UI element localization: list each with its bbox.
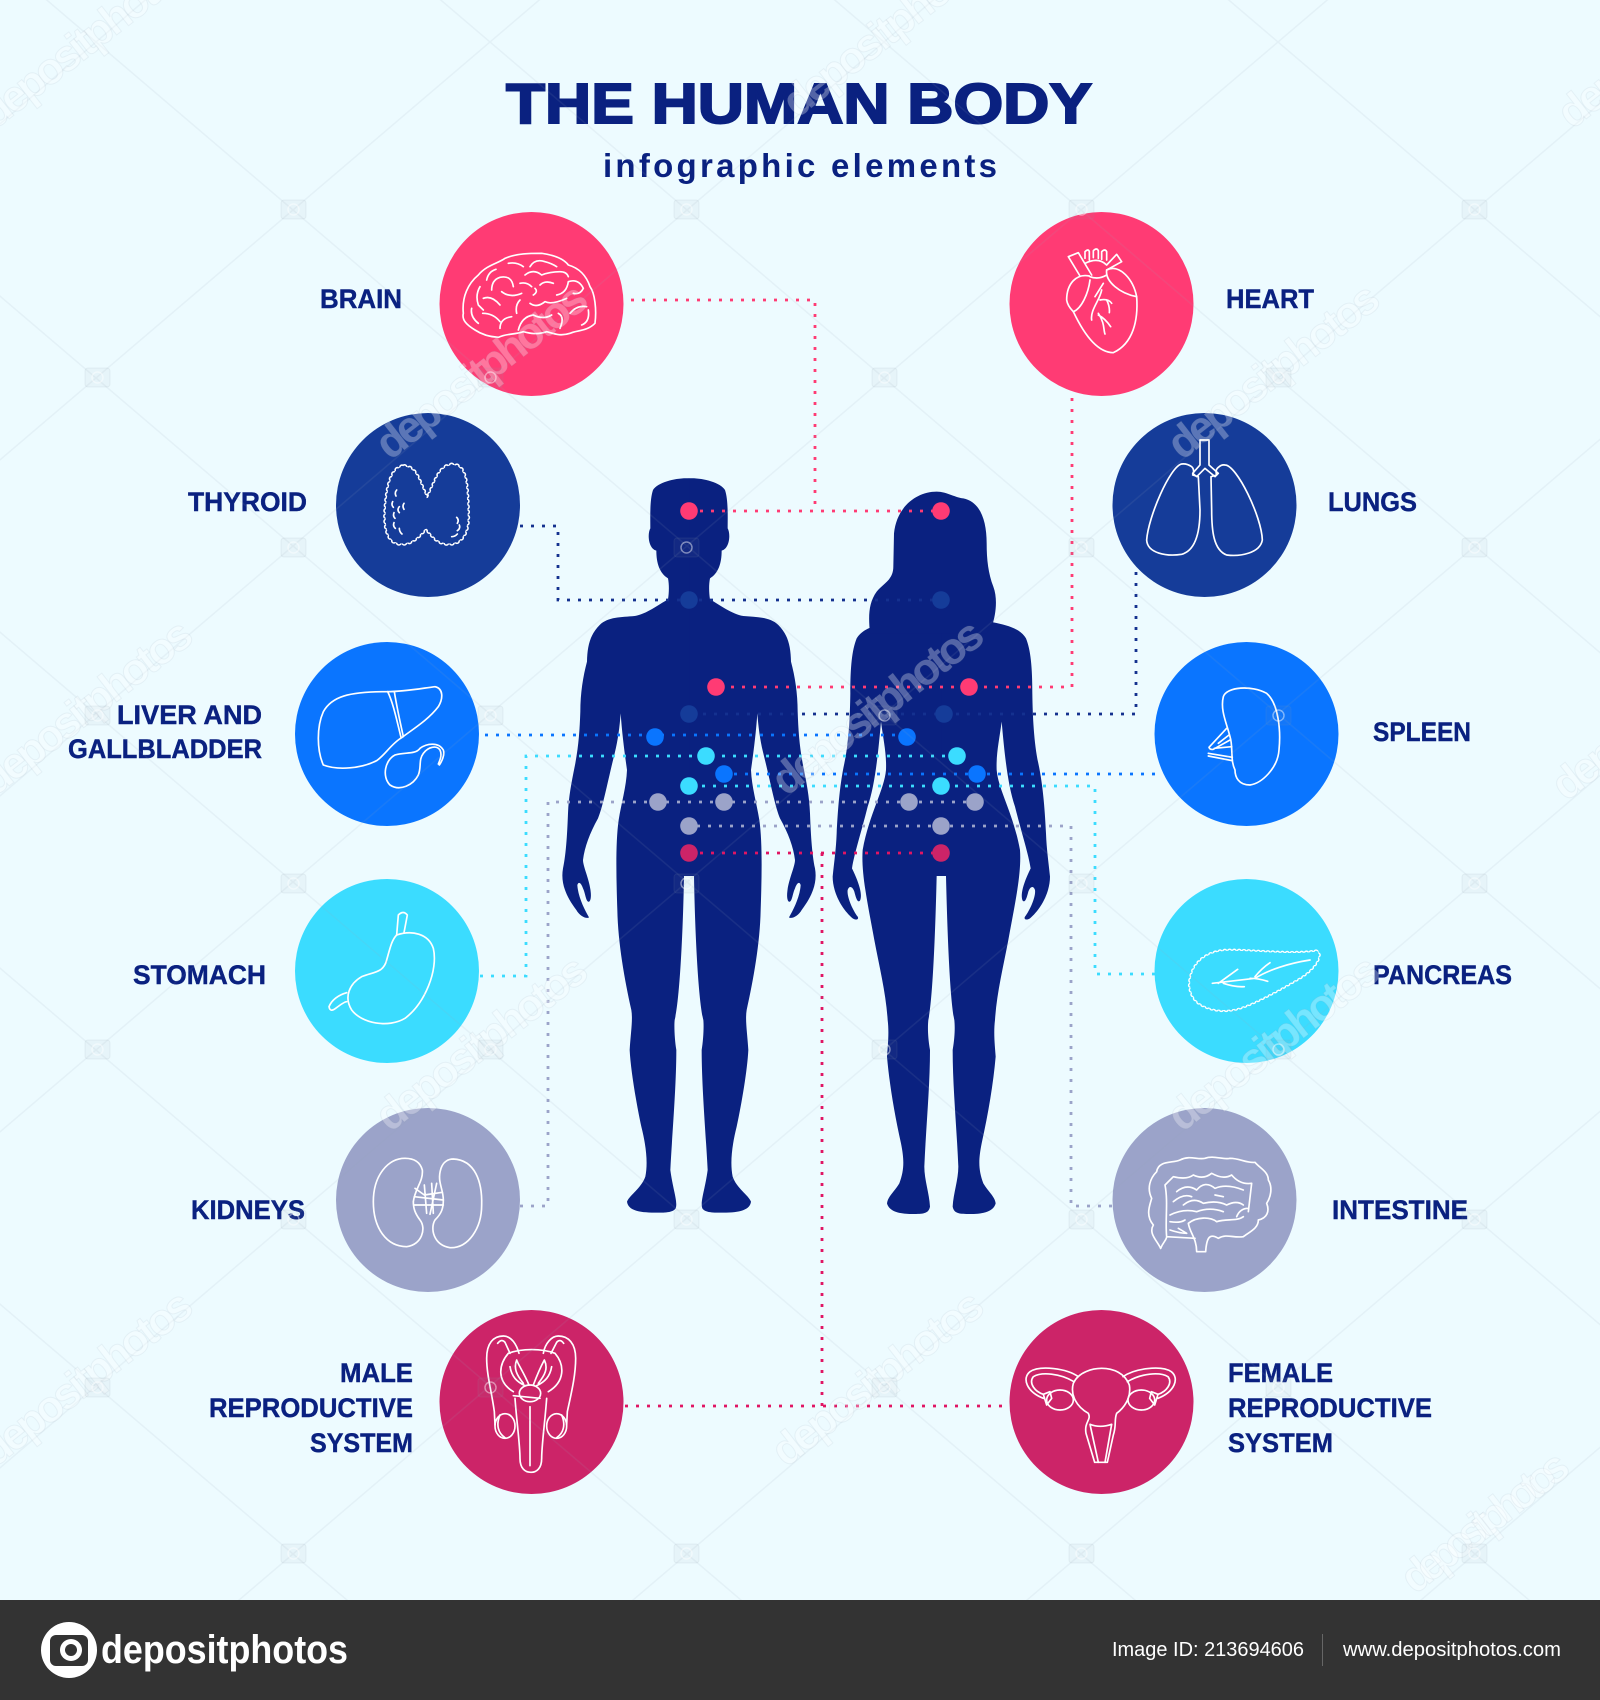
label: male reproductive system: REPRODUCTIVE [209,1393,413,1423]
circle: male reproductive system [440,1310,624,1494]
circle: stomach [295,879,479,1063]
icon: brain [463,253,596,337]
label: lungs: LUNGS [1328,487,1417,517]
icon: kidneys [373,1158,482,1248]
connector lines [480,300,1155,1406]
label: female reproductive system: SYSTEM [1228,1428,1333,1458]
icon: spleen [1208,688,1280,785]
icon: thyroid [386,465,467,543]
circle: female reproductive system [1010,1310,1194,1494]
circle: intestine [1112,1108,1296,1292]
watermark text: depositphotos [1158,945,1389,1141]
icon: female reproductive system [1026,1368,1175,1462]
watermark text: depositphotos [1158,273,1389,469]
title: THE HUMAN BODY [506,72,1092,136]
footer logo [41,1622,348,1678]
label: brain: BRAIN [320,284,402,314]
icon: stomach [329,912,434,1024]
organ markers on the bodies [646,502,986,862]
watermark text: depositphotos [1391,1441,1579,1603]
footer url: www.depositphotos.com [1342,1639,1561,1661]
circle: brain [440,212,624,396]
circle: pancreas [1154,879,1338,1063]
label: male reproductive system: MALE [340,1358,413,1388]
watermark cameras [85,200,1487,1563]
circle: lungs [1112,413,1296,597]
label: stomach: STOMACH [133,960,266,990]
icon: intestine [1149,1157,1271,1252]
label: liver and gallbladder [68,700,262,764]
label: female reproductive system: FEMALE [1228,1358,1333,1388]
footer logo: depositphotos [101,1628,348,1672]
circle: thyroid [336,413,520,597]
footer image id: Image ID: 213694606 [1112,1639,1304,1661]
icon: lungs [1147,440,1262,555]
label: thyroid: THYROID [188,487,307,517]
label: heart: HEART [1226,284,1314,314]
footer bar [0,1600,1600,1700]
label: male reproductive system [209,1358,413,1458]
label: spleen: SPLEEN [1373,717,1471,747]
label: liver and gallbladder: LIVER AND [117,700,262,730]
watermark text: depositphotos [762,1280,993,1476]
circle: heart [1010,212,1194,396]
label: female reproductive system [1228,1358,1432,1458]
watermark text: depositphotos [762,609,993,805]
circle: kidneys [336,1108,520,1292]
silhouette: man [562,478,816,1213]
subtitle: infographic elements [603,147,997,184]
label: male reproductive system: SYSTEM [310,1428,413,1458]
watermark text: depositphotos [366,273,597,469]
label: intestine: INTESTINE [1332,1195,1468,1225]
label: pancreas: PANCREAS [1373,960,1512,990]
icon: male reproductive system [487,1336,576,1472]
icon: liver and gallbladder [318,687,444,788]
label: kidneys: KIDNEYS [191,1195,305,1225]
circle: spleen [1154,642,1338,826]
watermark text: depositphotos [366,945,597,1141]
circle: liver and gallbladder [295,642,479,826]
label: liver and gallbladder: GALLBLADDER [68,734,262,764]
icon: pancreas [1191,951,1318,1009]
silhouette: woman [833,492,1050,1214]
label: female reproductive system: REPRODUCTIVE [1228,1393,1432,1423]
icon: heart [1067,249,1137,353]
